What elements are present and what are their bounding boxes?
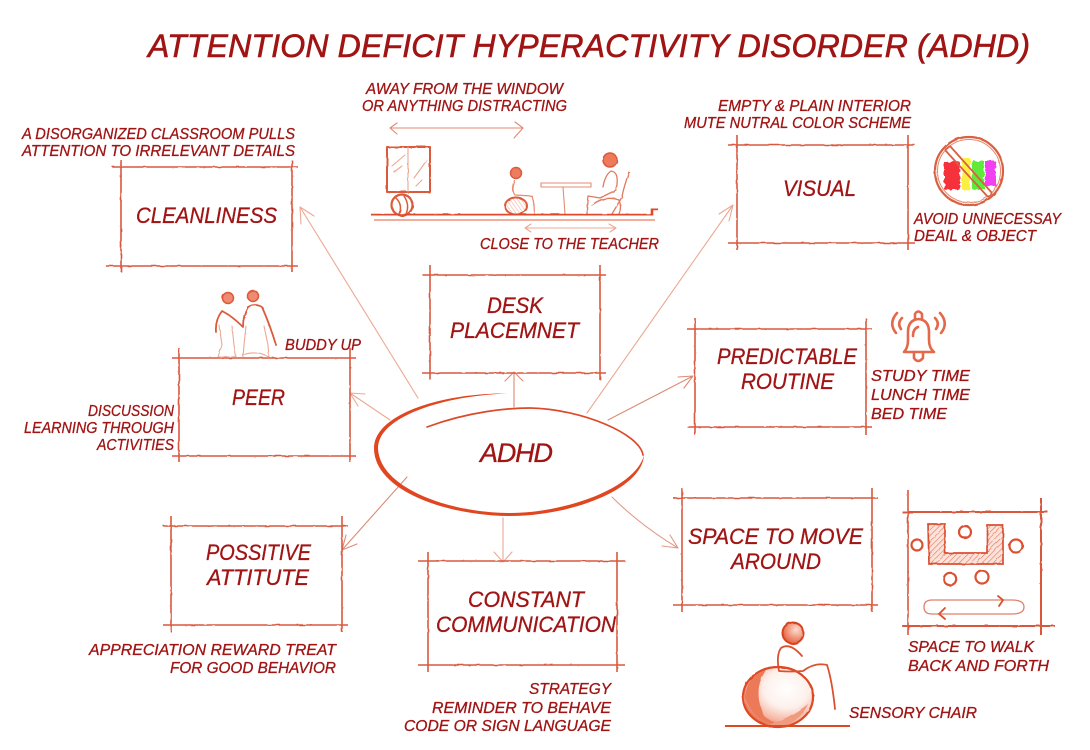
icon: sensory chair	[725, 622, 850, 727]
note: buddy up: BUDDY UP	[285, 337, 362, 354]
note: discussion: LEARNING THROUGH	[24, 420, 175, 437]
note: FOR GOOD BEHAVIOR	[170, 660, 336, 677]
note: APPRECIATION REWARD TREAT	[88, 642, 338, 659]
room frame	[902, 490, 1055, 635]
box frame	[418, 552, 625, 672]
heading: POSSITIVE	[206, 540, 311, 565]
note: interior	[684, 98, 912, 132]
note: ATTENTION TO IRRELEVANT DETAILS	[21, 143, 296, 160]
floor	[725, 725, 850, 727]
head	[782, 622, 804, 644]
note: close to teacher: CLOSE TO THE TEACHER	[480, 236, 659, 253]
panel: constant communication	[404, 552, 625, 735]
label: ADHD	[478, 438, 553, 468]
arrows from centre to topics	[300, 205, 733, 562]
box frame	[687, 318, 872, 435]
loop arrowheads	[939, 596, 1003, 619]
note: space to walk: BACK AND FORTH	[908, 658, 1050, 675]
heading: DESK	[487, 293, 544, 318]
arrow: to predictable routine	[608, 376, 693, 420]
panel: desk placement sketch	[362, 81, 659, 253]
icon: teacher on chair	[587, 153, 629, 215]
heading: AROUND	[729, 549, 821, 574]
walking loop arrow	[924, 600, 1024, 614]
box frame	[106, 160, 298, 272]
hatched U desk	[928, 524, 1003, 564]
heading	[450, 293, 580, 343]
heading: ROUTINE	[741, 369, 834, 394]
note: interior: EMPTY & PLAIN INTERIOR	[718, 98, 911, 115]
heading	[205, 540, 311, 590]
ellipse stroke	[374, 393, 644, 516]
arrow: to desk placement	[505, 372, 523, 407]
arrow: to space to move	[612, 497, 678, 548]
arrow: to visual	[587, 205, 733, 413]
note: away from window	[362, 81, 567, 115]
note: avoid detail: DEAIL & OBJECT	[914, 228, 1037, 245]
heading: SPACE TO MOVE	[688, 524, 863, 549]
heading: CONSTANT	[468, 587, 586, 612]
panel: cleanliness	[21, 126, 298, 272]
note	[404, 681, 613, 735]
note: routine times: BED TIME	[871, 406, 948, 423]
icon: room plan sketch	[902, 490, 1055, 635]
note: space to walk: SPACE TO WALK	[908, 639, 1035, 656]
heading: COMMUNICATION	[436, 612, 616, 637]
box frame	[422, 265, 606, 380]
note: REMINDER TO BEHAVE	[432, 700, 612, 717]
note	[21, 126, 296, 160]
central ellipse: ADHD	[374, 393, 644, 516]
heading: CLEANLINESS	[136, 203, 277, 228]
note: space to walk	[908, 639, 1050, 675]
note: avoid detail	[913, 211, 1063, 245]
note: discussion: DISCUSSION	[88, 403, 175, 420]
note: away from window: OR ANYTHING DISTRACTING	[362, 98, 567, 115]
panel: desk placemnet	[422, 265, 606, 380]
floor	[371, 209, 658, 215]
ball seat	[743, 667, 813, 727]
stools	[912, 526, 1022, 585]
heading: PEER	[232, 385, 285, 410]
note: routine times: LUNCH TIME	[871, 387, 971, 404]
panel: visual	[684, 98, 1063, 250]
panel: peer	[24, 290, 362, 462]
box frame	[728, 135, 915, 250]
note: routine times	[871, 368, 971, 423]
title: ATTENTION DEFICIT HYPERACTIVITY DISORDER (ADHD)	[146, 28, 1030, 64]
panel: possitive attitute	[88, 516, 348, 677]
icon: no colours	[935, 137, 1003, 205]
icon: table	[541, 183, 591, 214]
icon: two peers	[216, 290, 276, 357]
arrow: to possitive attitute	[342, 477, 407, 550]
icon: bell	[892, 312, 945, 361]
heading: VISUAL	[783, 176, 856, 201]
note: interior: MUTE NUTRAL COLOR SCHEME	[684, 115, 912, 132]
heading	[717, 344, 857, 394]
note: discussion: ACTIVITIES	[96, 437, 175, 454]
note: routine times: STUDY TIME	[871, 368, 971, 385]
icon: window	[387, 147, 430, 192]
box frame	[673, 488, 878, 612]
box frame	[163, 516, 348, 632]
heading	[436, 587, 616, 637]
double arrow: close to teacher	[525, 224, 616, 232]
arrow: to constant communication	[494, 518, 512, 562]
note: away from window: AWAY FROM THE WINDOW	[365, 81, 564, 98]
note	[88, 642, 338, 677]
heading: PLACEMNET	[450, 318, 580, 343]
note: discussion	[24, 403, 175, 454]
heading: PREDICTABLE	[717, 344, 857, 369]
note: sensory chair: SENSORY CHAIR	[849, 705, 977, 722]
heading: ATTITUTE	[205, 565, 309, 590]
icon: ball	[392, 194, 412, 216]
body	[778, 646, 835, 709]
second floor line	[374, 219, 655, 221]
icon: student on ball	[505, 168, 534, 214]
arrow: to cleanliness	[300, 207, 418, 398]
note: avoid detail: AVOID UNNECESSAY	[913, 211, 1063, 228]
double arrow: distance from window	[390, 122, 523, 138]
arrow: to peer	[350, 393, 390, 420]
box frame	[172, 348, 356, 462]
panel: predictable routine	[687, 312, 971, 435]
note: STRATEGY	[529, 681, 613, 698]
note: A DISORGANIZED CLASSROOM PULLS	[21, 126, 296, 143]
heading	[688, 524, 863, 574]
note: CODE OR SIGN LANGUAGE	[404, 718, 612, 735]
panel: space to move around	[673, 488, 878, 612]
